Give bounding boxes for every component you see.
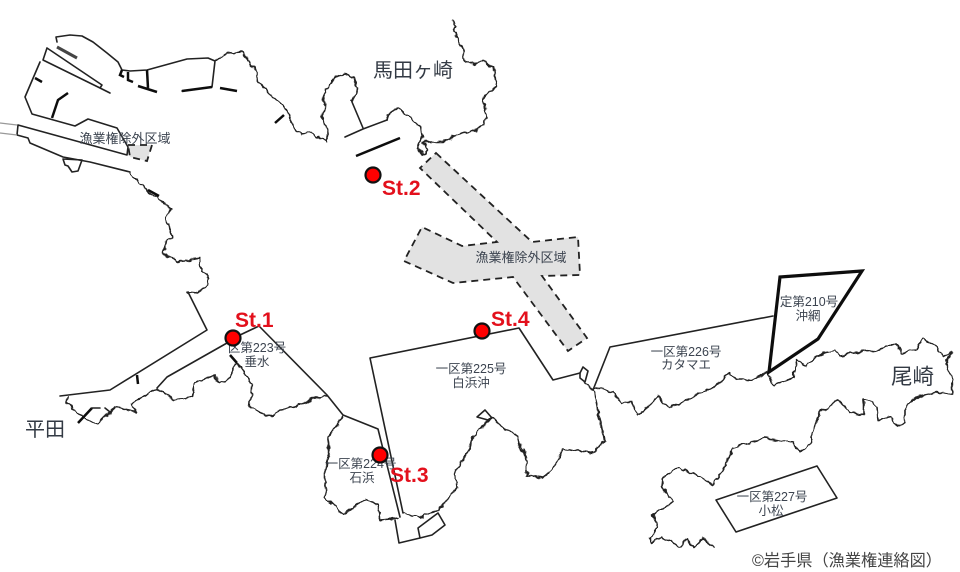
zone label 223: 区第223号 (228, 340, 286, 355)
copyright credit: ©岩手県（漁業権連絡図） (752, 552, 942, 570)
zone label 225: 白浜沖 (452, 375, 490, 390)
zone label 225: 一区第225号 (436, 361, 506, 376)
place label: Ozaki: 尾崎 (891, 365, 934, 389)
exclusion label centre: 漁業権除外区域 (475, 250, 567, 265)
zone label 224: 石浜 (349, 471, 375, 485)
station St.2: St.2 (382, 177, 421, 200)
zone label 226: カタマエ (661, 358, 711, 372)
exclusion label north-west: 漁業権除外区域 (79, 131, 171, 146)
station St.1 (226, 309, 274, 346)
exclusion zones (128, 145, 587, 351)
zone boundaries (157, 271, 862, 543)
place label: Madagasaki: 馬田ヶ崎 (373, 59, 453, 82)
zone label 226: 一区第226号 (651, 344, 721, 359)
zone label 223: 垂水 (244, 355, 270, 369)
zone label 210: 定第210号 (780, 294, 838, 309)
station St.2 (366, 168, 421, 200)
zone label 210: 沖網 (795, 309, 821, 323)
station St.1: St.1 (235, 309, 274, 332)
place label: Hirata: 平田 (25, 419, 65, 441)
zone label 227: 一区第227号 (737, 489, 807, 504)
station St.4: St.4 (491, 308, 530, 331)
station St.3: St.3 (390, 464, 429, 487)
zone label 227: 小松 (758, 504, 784, 518)
harbour structures (0, 35, 400, 423)
station St.4 (474, 308, 530, 338)
zone label 224: 一区第224号 (326, 456, 396, 471)
station St.3 (372, 448, 429, 487)
